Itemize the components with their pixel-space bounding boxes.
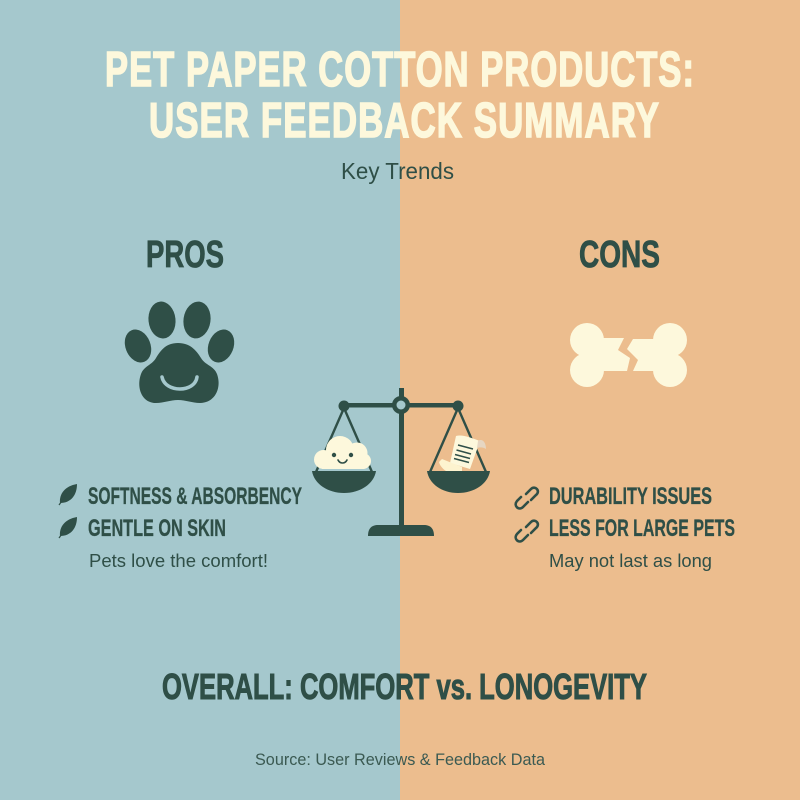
icon: balance scale	[312, 388, 490, 536]
con item: durability issues: DURABILITY ISSUES	[549, 483, 712, 510]
icon: leaf	[59, 517, 77, 538]
pro item: softness and absorbency: SOFTNESS & ABSORBENCY	[88, 483, 302, 510]
icon: paper scroll	[439, 435, 486, 471]
heading: cons: CONS	[579, 234, 660, 276]
con note: May not last as long	[549, 550, 712, 571]
panel: cons background	[400, 0, 800, 800]
icon: chain link	[516, 521, 538, 541]
pro note: Pets love the comfort!	[89, 550, 268, 571]
panel: pros background	[0, 0, 400, 800]
icon: paw print	[120, 300, 239, 403]
source note: Source: User Reviews & Feedback Data	[255, 751, 546, 769]
heading: pros: PROS	[146, 234, 224, 276]
subtitle: Key Trends	[341, 158, 454, 184]
list: pros	[59, 483, 302, 571]
icon: leaf	[59, 484, 77, 505]
icon: chain link	[516, 488, 538, 508]
list: cons	[516, 483, 735, 571]
icon: smiling cotton cloud	[314, 436, 371, 469]
pro item: gentle on skin: GENTLE ON SKIN	[88, 515, 226, 542]
title	[105, 43, 695, 148]
icon: broken bone	[570, 323, 687, 387]
